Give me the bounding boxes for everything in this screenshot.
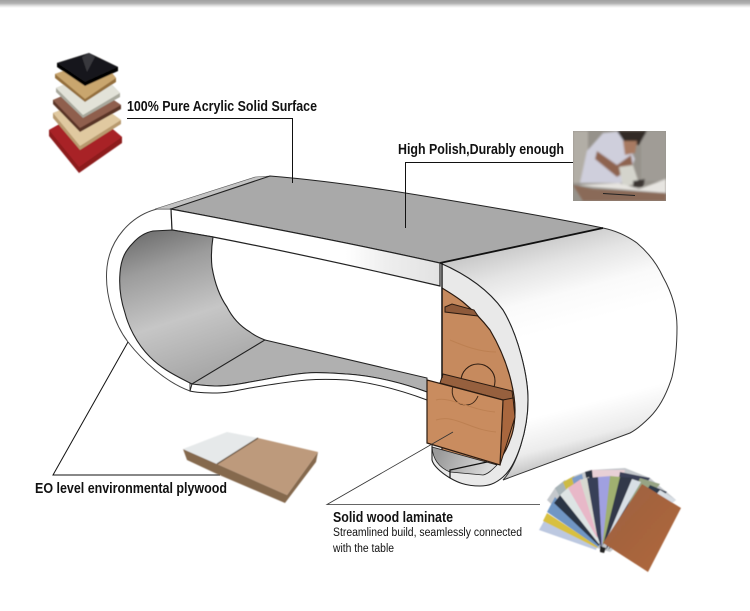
desk right body: [440, 228, 677, 480]
cable hole upper: [461, 364, 495, 398]
white laminate: [183, 432, 258, 464]
floor white lip: [190, 373, 427, 400]
plywood side edges: [183, 449, 318, 503]
wood grain: [436, 340, 496, 432]
wood face: [217, 438, 318, 495]
desk left outer shell: [107, 209, 190, 391]
floor panel: [192, 340, 427, 392]
photo: plywood sample: [183, 432, 318, 503]
vertical wood edge: [441, 263, 443, 378]
front strip under the top: [171, 209, 440, 286]
granite tile: [56, 70, 120, 118]
label: plywood: [35, 342, 227, 497]
large wood swatch: [603, 484, 681, 572]
inner curved gradient panel: [120, 230, 265, 384]
right end ring: [432, 263, 528, 486]
yellow swatch: [543, 513, 598, 548]
back swatches: [547, 468, 676, 552]
pink swatch: [568, 479, 599, 538]
upper wood slat: [445, 304, 478, 316]
light grey swatch: [580, 477, 602, 545]
desk illustration: [107, 176, 677, 486]
slat across the wood: [440, 374, 513, 400]
top shadow bar: [0, 0, 750, 8]
swatch fan pivot: [600, 546, 606, 553]
description line 2: with the table: [332, 543, 394, 555]
seam: [217, 438, 258, 464]
desk top surface: [171, 176, 603, 263]
label: acrylic surface: [127, 99, 317, 183]
olive swatch: [602, 476, 621, 548]
heading: Solid wood laminate: [333, 510, 453, 526]
icon: laminate colour swatches fan: [539, 468, 681, 572]
heading: High Polish,Durably enough: [398, 142, 564, 158]
floor under drawer: [432, 447, 497, 475]
photo: worker polishing: [573, 131, 666, 201]
wood interior: [442, 288, 515, 468]
icon: stacked surface samples: [49, 53, 122, 173]
desk top light edge strip: [155, 176, 270, 209]
leader line: [127, 118, 292, 183]
dark swatch: [554, 494, 600, 546]
periwinkle swatch: [598, 476, 611, 550]
brown tile: [53, 84, 121, 132]
label: high polish: [398, 142, 573, 228]
red tile: [49, 108, 122, 173]
pale blue swatch: [539, 521, 597, 550]
heading: 100% Pure Acrylic Solid Surface: [127, 99, 317, 115]
blue swatch: [547, 497, 600, 547]
wood front panel: [427, 380, 503, 465]
tan tile: [55, 58, 116, 102]
wood side panel: [500, 398, 515, 465]
leader line: [406, 162, 573, 228]
navy swatch: [587, 477, 602, 550]
label: solid wood laminate: [327, 432, 540, 555]
beige tile: [53, 98, 121, 150]
dark blue swatch: [603, 477, 633, 545]
black tile: [57, 53, 118, 86]
cable hole lower: [452, 386, 478, 405]
white swatch: [560, 487, 601, 544]
right body top edge: [440, 228, 603, 263]
heading: EO level environmental plywood: [35, 481, 227, 497]
leader line: [53, 342, 220, 475]
leader line: [327, 432, 540, 504]
white-grey swatch: [603, 479, 641, 548]
description line 1: Streamlined build, seamlessly connected: [333, 527, 522, 539]
